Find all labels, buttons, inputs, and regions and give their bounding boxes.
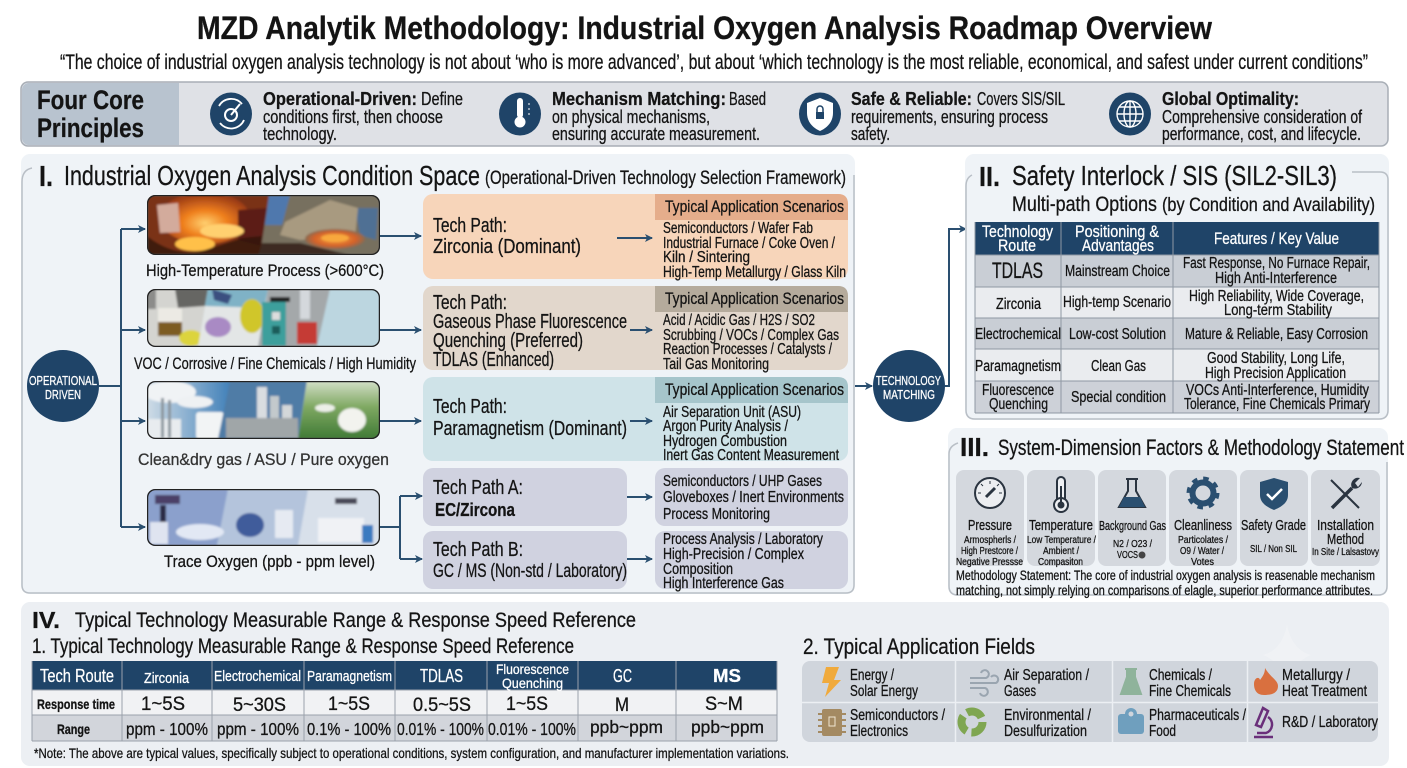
arrow: condition space to technology matching xyxy=(855,385,872,387)
panel IV: range and response reference xyxy=(21,602,1389,766)
row: fluorescence quenching: Fluorescence xyxy=(982,382,1054,399)
principle: operational-driven: Operational-Driven: xyxy=(263,89,417,109)
card: zirconia path: Tech Path: xyxy=(433,214,507,237)
response time row: Response time xyxy=(37,696,115,712)
range row xyxy=(57,717,764,739)
photo: VOC and corrosive xyxy=(147,289,380,347)
footnote: *Note: The above are typical values, specifically subject to operational conditions, system configuration, and manufacturer implementation variations. xyxy=(34,745,789,761)
factor: background gas: Background Gas xyxy=(1099,519,1166,533)
subheading: application fields: 2. Typical Application Fields xyxy=(803,634,1035,659)
principle: mechanism matching xyxy=(552,89,766,144)
range row: Range xyxy=(57,721,90,737)
node: technology matching: MATCHING xyxy=(883,388,935,402)
factor: cleanliness xyxy=(1169,470,1237,568)
response time row: 5~30S xyxy=(233,695,286,716)
label: trace oxygen: Trace Oxygen (ppb - ppm level) xyxy=(164,552,375,571)
card: zirconia path: Zirconia (Dominant) xyxy=(433,235,581,258)
field: energy: Solar Energy xyxy=(850,683,918,700)
principle: safe and reliable: requirements, ensuring process xyxy=(851,107,1048,127)
field: environmental recycle xyxy=(962,707,1091,740)
card: tech path B: Tech Path B: xyxy=(433,538,523,561)
response time row: M xyxy=(615,695,629,716)
principle: operational-driven: conditions first, then choose xyxy=(263,107,443,127)
table: measurable range xyxy=(32,661,777,741)
principle: mechanism matching: ensuring accurate measurement. xyxy=(552,124,760,144)
row: electrochemical xyxy=(975,326,1368,343)
heading: four core principles: Principles xyxy=(37,113,144,143)
factor: pressure: Pressure xyxy=(968,517,1012,534)
card: paramagnetism path: Air Separation Unit (ASU) xyxy=(663,404,801,421)
field: metallurgy: Heat Treatment xyxy=(1282,683,1367,700)
node: operational driven xyxy=(27,350,99,422)
row: TDLAS: Mainstream Choice xyxy=(1065,263,1170,280)
card: zirconia path xyxy=(423,194,848,281)
row: zirconia xyxy=(996,288,1364,319)
table header xyxy=(982,223,1339,255)
row: zirconia: Zirconia xyxy=(996,296,1041,313)
card: tech path B: High Interference Gas xyxy=(663,575,784,592)
field: energy: Energy / xyxy=(850,667,894,684)
principle: safe and reliable: Covers SIS/SIL xyxy=(977,89,1065,109)
factor: installation method: Method xyxy=(1327,531,1364,548)
card: paramagnetism path: Typical Application Scenarios xyxy=(665,381,844,399)
table header: Advantages xyxy=(1082,237,1154,255)
card: tech path B: GC / MS (Non-std / Laboratory) xyxy=(433,560,627,582)
card: fluorescence path xyxy=(423,286,848,373)
factor: pressure: High Prestcore / xyxy=(961,546,1018,557)
field: environmental recycle: Environmental / xyxy=(1004,707,1091,724)
card: fluorescence path: Tech Path: xyxy=(433,292,507,314)
field: energy xyxy=(822,667,918,700)
field: chemicals xyxy=(1121,667,1231,700)
response time row xyxy=(37,694,743,716)
factor: temperature: Low Temperature / xyxy=(1027,535,1096,546)
label: VOC and corrosive: VOC / Corrosive / Fine Chemicals / High Humidity xyxy=(134,354,416,373)
range row: 0.01% - 100% xyxy=(488,719,576,739)
factor: installation method xyxy=(1311,470,1380,566)
field: air separation xyxy=(970,667,1089,700)
field: semiconductors: Semiconductors / xyxy=(850,707,945,724)
factor: cleanliness: Particolates / xyxy=(1178,535,1228,546)
card: fluorescence path: TDLAS (Enhanced) xyxy=(433,349,554,371)
photo: trace oxygen xyxy=(147,489,380,546)
panel: four core principles xyxy=(21,82,1388,146)
row: TDLAS: High Anti-Interference xyxy=(1215,270,1337,287)
arrow: technology matching to safety interlock xyxy=(945,229,966,386)
factor: temperature: Ambient / xyxy=(1043,546,1079,557)
principle: safe and reliable: Safe & Reliable: xyxy=(851,89,972,109)
factor: pressure: Negative Pressse xyxy=(956,557,1023,568)
icon: globe xyxy=(1109,92,1151,136)
table header row: GC xyxy=(613,666,632,686)
card: fluorescence path: Scrubbing / VOCs / Complex Gas xyxy=(663,327,839,344)
principle: mechanism matching: Mechanism Matching: xyxy=(552,89,726,109)
icon: shield xyxy=(799,92,841,136)
node: operational driven: OPERATIONAL xyxy=(29,374,97,388)
factor: background gas: N2 / O23 / xyxy=(1113,539,1152,550)
photo: clean dry gas xyxy=(144,381,380,439)
row: paramagnetism: Clean Gas xyxy=(1091,358,1146,375)
heading: section I: (Operational-Driven Technology Selection Framework) xyxy=(485,168,846,189)
factor: temperature: Temperature xyxy=(1029,517,1093,534)
card: paramagnetism path: Hydrogen Combustion xyxy=(663,433,787,450)
field: chemicals: Fine Chemicals xyxy=(1149,683,1231,700)
principle: safe and reliable: safety. xyxy=(851,124,890,144)
heading: section I xyxy=(39,160,846,193)
label: high temperature: High-Temperature Process (>600°C) xyxy=(146,261,384,280)
field: metallurgy xyxy=(1254,667,1367,700)
table header: Technology xyxy=(982,223,1054,241)
heading: section II: II. xyxy=(979,161,1000,192)
factor: cleanliness: Cleanliness xyxy=(1174,517,1232,534)
card: zirconia path: Kiln / Sintering xyxy=(663,249,750,266)
row: paramagnetism xyxy=(975,350,1346,382)
card: tech path A: Process Monitoring xyxy=(663,506,770,523)
factor: safety grade xyxy=(1240,470,1308,566)
card: paramagnetism path: Tech Path: xyxy=(433,395,507,418)
heading: section I: I. xyxy=(39,161,53,193)
heading: four core principles: Four Core xyxy=(37,85,144,115)
response time row: 0.5~5S xyxy=(413,695,471,716)
response time row: S~M xyxy=(705,694,743,715)
field: pharmaceuticals xyxy=(1118,707,1246,740)
card: zirconia path: Semiconductors / Wafer Fab xyxy=(663,220,813,237)
row: electrochemical: Low-cost Solution xyxy=(1069,326,1166,343)
factor: installation method: Installation xyxy=(1317,517,1374,534)
card: paramagnetism path: Paramagnetism (Dominant) xyxy=(433,417,627,440)
table header: Positioning & xyxy=(1075,223,1159,241)
card: paramagnetism path xyxy=(423,377,848,464)
row: TDLAS: TDLAS xyxy=(992,258,1043,283)
heading: section IV: IV. xyxy=(32,607,60,633)
card: zirconia path: Typical Application Scenarios xyxy=(665,198,844,216)
factor: cleanliness: Votes xyxy=(1191,557,1214,568)
response time row: 1~5S xyxy=(141,694,185,715)
factor: background gas: VOCS xyxy=(1117,550,1138,561)
row: TDLAS xyxy=(992,255,1370,287)
response time row: 1~5S xyxy=(328,694,370,715)
heading: section IV: Typical Technology Measurable Range & Response Speed Reference xyxy=(75,609,636,632)
subheading: range reference: 1. Typical Technology Measurable Range & Response Speed Reference xyxy=(32,635,574,658)
heading: four core principles xyxy=(37,85,144,143)
card: tech path A: Gloveboxes / Inert Environments xyxy=(663,489,844,506)
range row: 0.1% - 100% xyxy=(307,719,391,739)
heading: section III: III. xyxy=(960,432,989,462)
card: zirconia path: Industrial Furnace / Coke Oven / xyxy=(663,235,836,252)
row: fluorescence quenching: Quenching xyxy=(989,396,1048,413)
range row: ppb~ppm xyxy=(590,717,663,737)
principle: safe and reliable xyxy=(851,89,1065,144)
table header row: MS xyxy=(713,666,741,686)
row: electrochemical: Electrochemical xyxy=(975,326,1061,343)
card: fluorescence path: Reaction Processes / Catalysts / xyxy=(663,341,833,358)
field: semiconductors xyxy=(818,707,945,740)
factor: safety grade: Safety Grade xyxy=(1241,517,1306,534)
table header row: Quenching xyxy=(502,675,563,691)
card: fluorescence path: Acid / Acidic Gas / H2S / SO2 xyxy=(663,312,815,329)
subheading: multi-path options: Multi-path Options xyxy=(1012,193,1157,216)
card: fluorescence path: Typical Application Scenarios xyxy=(665,290,844,308)
card: tech path B: High-Precision / Complex xyxy=(663,546,804,563)
field: environmental recycle: Desulfurization xyxy=(1004,723,1087,740)
card: tech path A: Semiconductors / UHP Gases xyxy=(663,473,822,490)
field: R and D laboratory: R&D / Laboratory xyxy=(1282,714,1378,731)
row: fluorescence quenching xyxy=(982,382,1370,413)
decorative sparkle xyxy=(1263,625,1311,688)
factor: temperature: Compasiton xyxy=(1038,557,1083,568)
range row: ppm - 100% xyxy=(126,719,208,739)
factor: safety grade: SIL / Non SIL xyxy=(1250,544,1297,555)
card: tech path B xyxy=(423,531,848,592)
panel I: condition space xyxy=(21,154,855,594)
range row: ppm - 100% xyxy=(217,719,299,739)
row: paramagnetism: Good Stability, Long Life, xyxy=(1207,350,1345,367)
card: tech path A: EC/Zircona xyxy=(435,499,516,520)
response time row: 1~5S xyxy=(506,694,548,715)
factor: installation method: In Site / Lalsastovy xyxy=(1312,547,1379,558)
principle: operational-driven: Define xyxy=(421,89,463,109)
field: air separation: Air Separation / xyxy=(1004,667,1089,684)
card: zirconia path: High-Temp Metallurgy / Glass Kiln xyxy=(663,264,846,281)
card: fluorescence path: Gaseous Phase Fluorescence xyxy=(433,311,627,333)
row: zirconia: High Reliability, Wide Coverage, xyxy=(1189,288,1364,305)
card: tech path A xyxy=(423,468,848,526)
card: paramagnetism path: Argon Purity Analysis / xyxy=(663,418,789,435)
table header: Features / Key Value xyxy=(1214,230,1339,248)
flow connectors from operational driven xyxy=(99,229,422,559)
factor: pressure xyxy=(956,470,1024,568)
row: zirconia: High-temp Scenario xyxy=(1063,294,1171,311)
range row: ppb~ppm xyxy=(691,717,764,737)
factor: pressure: Armospherls / xyxy=(964,535,1016,546)
table header row xyxy=(40,661,741,691)
principle: mechanism matching: Based xyxy=(729,89,766,109)
table header row: Tech Route xyxy=(40,666,114,686)
table header row: TDLAS xyxy=(420,666,463,686)
card: fluorescence path: Quenching (Preferred) xyxy=(433,330,583,352)
panel II: safety interlock xyxy=(965,154,1389,420)
icon: thermometer xyxy=(499,92,541,136)
card: tech path B: Composition xyxy=(663,561,733,578)
title: MZD Analytik Methodology: Industrial Oxygen Analysis Roadmap Overview xyxy=(197,10,1212,46)
heading: section I: Industrial Oxygen Analysis Condition Space xyxy=(64,160,480,191)
table header row: Zirconia xyxy=(144,671,190,687)
range row: 0.01% - 100% xyxy=(397,719,484,739)
factor: background gas xyxy=(1098,470,1166,566)
grid: application fields xyxy=(802,661,1378,742)
node: technology matching: TECHNOLOGY xyxy=(876,374,941,388)
row: zirconia: Long-term Stability xyxy=(1224,302,1332,319)
field: pharmaceuticals: Food xyxy=(1149,723,1176,740)
card: paramagnetism path: Inert Gas Content Measurement xyxy=(663,447,840,464)
node: technology matching xyxy=(873,350,945,422)
principle: global optimality xyxy=(1162,89,1363,144)
field: pharmaceuticals: Pharmaceuticals / xyxy=(1149,707,1246,724)
panel III: system dimension factors xyxy=(948,428,1404,598)
row: paramagnetism: High Precision Application xyxy=(1205,365,1346,382)
row: paramagnetism: Paramagnetism xyxy=(975,358,1061,375)
principle: operational-driven: technology. xyxy=(263,124,337,144)
factor: temperature xyxy=(1027,470,1096,568)
principle: operational-driven xyxy=(263,89,463,144)
card: tech path A: Tech Path A: xyxy=(433,476,523,499)
table header row: Paramagnetism xyxy=(307,669,392,685)
field: chemicals: Chemicals / xyxy=(1149,667,1212,684)
icon: target xyxy=(210,92,252,136)
table header: Route xyxy=(998,237,1036,255)
card: tech path B: Process Analysis / Laboratory xyxy=(663,531,823,548)
principle: mechanism matching: on physical mechanisms, xyxy=(552,107,710,127)
row: fluorescence quenching: Special condition xyxy=(1071,389,1166,406)
table header row: Fluorescence xyxy=(496,661,569,677)
node: operational driven: DRIVEN xyxy=(45,388,81,402)
field: semiconductors: Electronics xyxy=(850,723,908,740)
subheading: multi-path options xyxy=(1012,193,1375,216)
label: clean and dry gas: Clean&dry gas / ASU / Pure oxygen xyxy=(138,450,389,469)
factor: cleanliness: O9 / Water / xyxy=(1180,546,1224,557)
card: fluorescence path: Tail Gas Monitoring xyxy=(663,356,769,373)
principle: global optimality: Global Optimality: xyxy=(1162,89,1299,109)
methodology statement xyxy=(956,568,1375,598)
field: air separation: Gases xyxy=(1004,683,1036,700)
field: R and D laboratory xyxy=(1254,708,1378,737)
photo: high temperature xyxy=(147,192,380,255)
table header row: Electrochemical xyxy=(214,669,301,685)
table: technology routes xyxy=(975,222,1379,413)
field: metallurgy: Metallurgy / xyxy=(1282,667,1350,684)
